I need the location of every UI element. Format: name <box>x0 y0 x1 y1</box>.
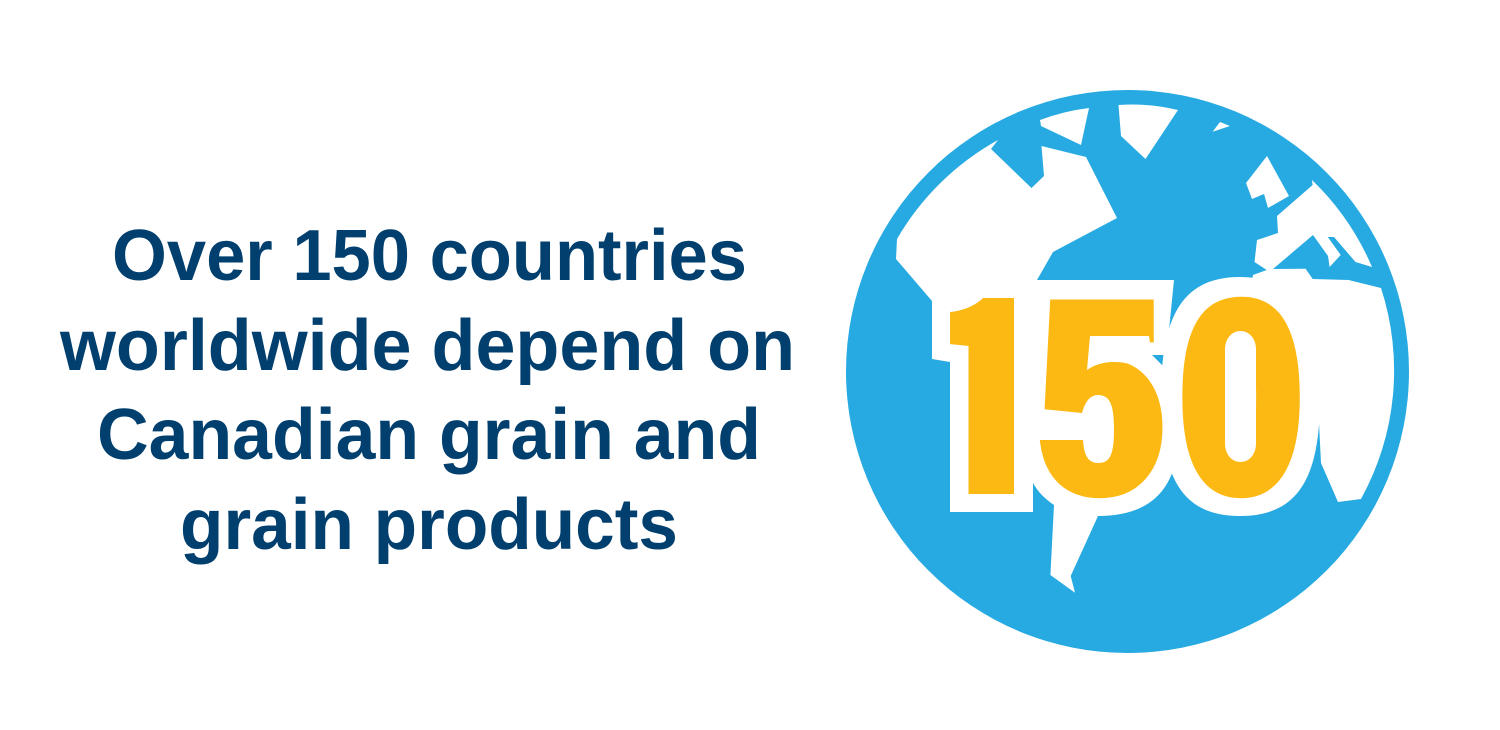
number 150: 5 <box>1040 252 1162 544</box>
number 150: 1 <box>905 251 1061 543</box>
text block: headline <box>59 216 795 565</box>
globe continents <box>896 105 1394 593</box>
number outline <box>950 277 1320 516</box>
number 150: 0 <box>1180 252 1302 544</box>
globe ocean <box>846 90 1409 653</box>
number 150 <box>950 296 1300 498</box>
text block: headline: worldwide depend on <box>59 306 795 386</box>
text block: headline: Canadian grain and <box>97 395 761 475</box>
text block: headline: Over 150 countries <box>112 216 747 296</box>
icon: globe with 150 <box>846 90 1409 653</box>
text block: headline: grain products <box>180 485 678 565</box>
